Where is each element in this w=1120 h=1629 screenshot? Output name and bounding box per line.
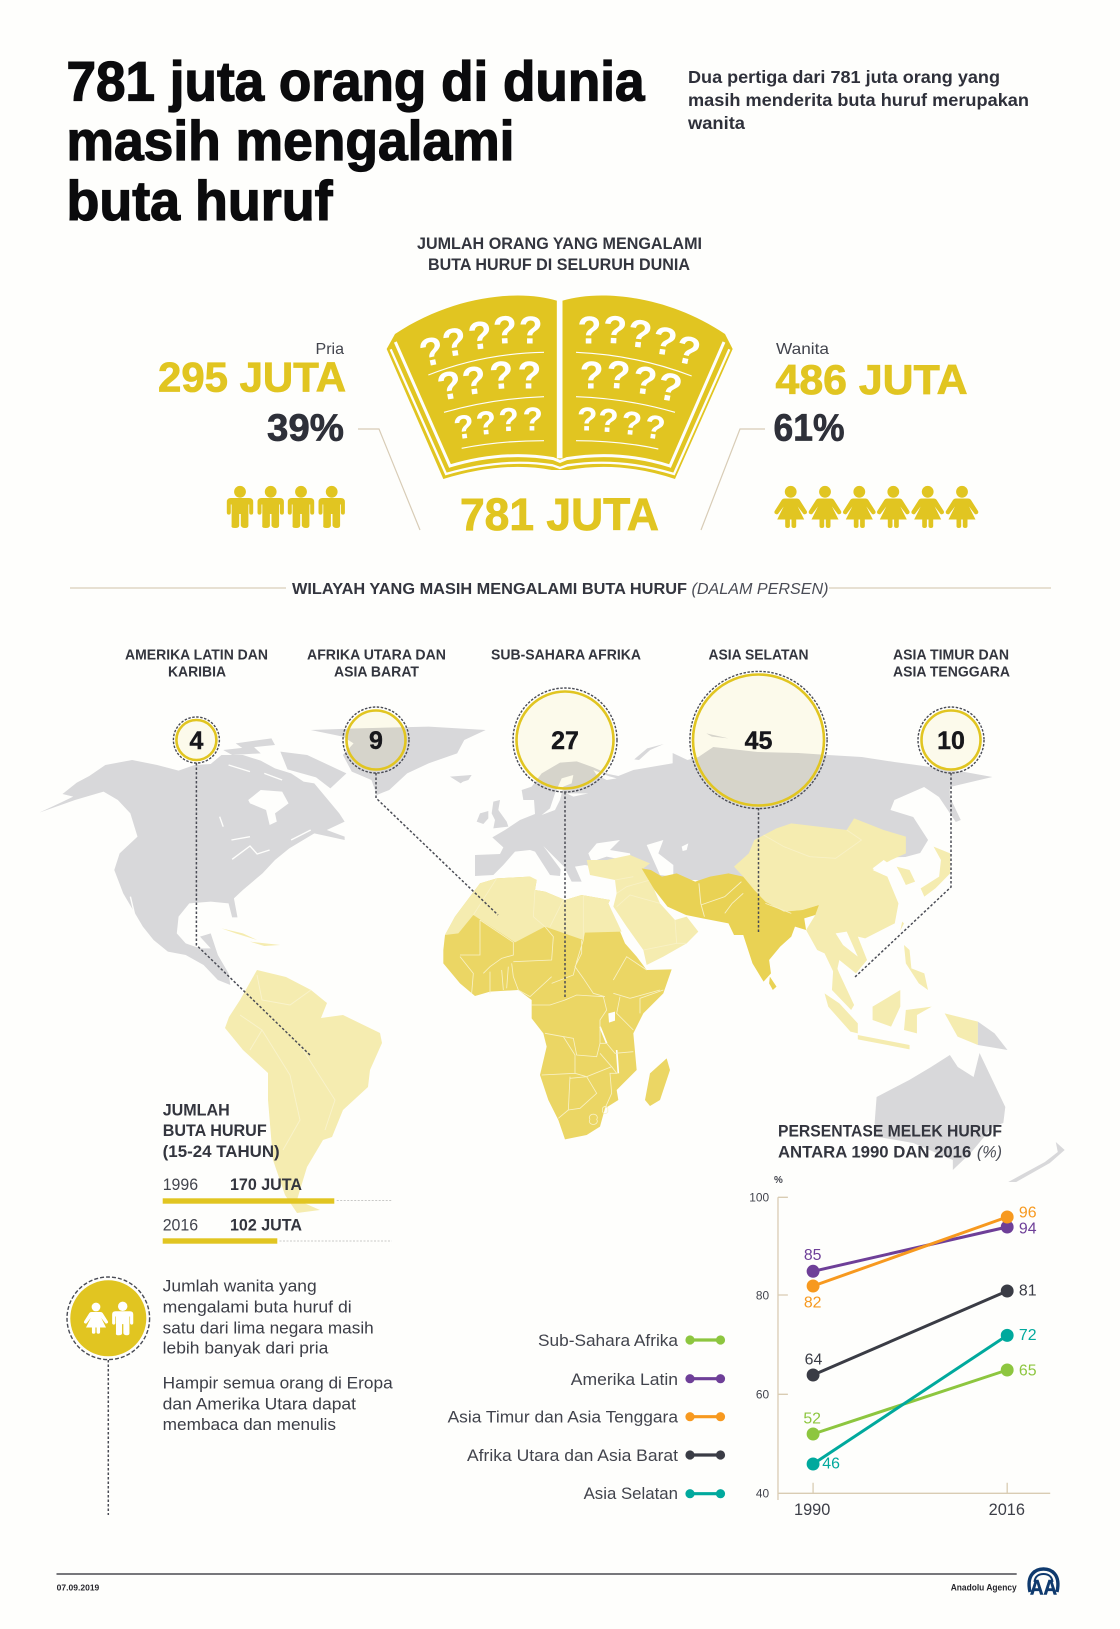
bar: 2016 <box>163 1216 392 1244</box>
icon: open book with question marks: ? <box>620 405 643 443</box>
bubble: 45 <box>690 671 827 809</box>
panel heading: (15-24 TAHUN) <box>163 1143 280 1161</box>
line chart <box>749 1175 1050 1519</box>
text block: notes: satu dari lima negara masih <box>163 1318 374 1337</box>
world map <box>21 727 1065 1213</box>
panel: men: 295 JUTA <box>158 354 346 401</box>
chart legend: Amerika Latin <box>571 1370 678 1389</box>
series: Sub-Sahara Afrika: 65 <box>1019 1362 1037 1379</box>
subtitle <box>687 67 1029 133</box>
panel: women: Wanita <box>776 341 829 358</box>
map: south america <box>225 970 382 1213</box>
icon: open book with question marks <box>387 295 733 479</box>
icon: open book with question marks: ? <box>466 313 494 359</box>
title: buta huruf <box>66 169 333 232</box>
icon: open book with question marks: ? <box>522 401 543 438</box>
series: Asia Selatan: 72 <box>1019 1327 1037 1344</box>
panel heading: JUMLAH <box>163 1102 230 1120</box>
icon: open book with question marks: ? <box>580 353 604 397</box>
leader lines <box>196 763 951 1056</box>
icon: Anadolu Agency logo: AA <box>1030 1576 1057 1600</box>
chart axes: 60 <box>756 1387 769 1402</box>
icon: open book with question marks: ? <box>597 402 619 441</box>
icon: open book with question marks: ? <box>577 308 601 352</box>
panel: women <box>774 341 978 528</box>
series: Asia Timur dan Asia Tenggara: 82 <box>804 1295 822 1312</box>
icon: open book with question marks: ? <box>415 328 448 376</box>
series: Afrika Utara dan Asia Barat <box>805 1283 1037 1382</box>
icon: couple badge <box>67 1277 150 1360</box>
icon: open book with question marks: ? <box>492 308 518 353</box>
icon: open book with question marks: ? <box>672 327 704 375</box>
icon: open book with question marks: ? <box>498 401 520 440</box>
region labels: ASIA TIMUR DAN <box>893 648 1009 664</box>
series: Afrika Utara dan Asia Barat: 64 <box>805 1351 822 1368</box>
icon: open book with question marks: ? <box>474 405 498 443</box>
title <box>66 50 645 232</box>
bar: 1996: 170 JUTA <box>230 1176 302 1194</box>
icon: open book with question marks: ? <box>626 311 654 357</box>
series: Asia Timur dan Asia Tenggara: 96 <box>1019 1204 1037 1221</box>
icon: open book with question marks: ? <box>460 358 489 404</box>
map: europe <box>460 761 720 883</box>
heading: global count <box>417 235 702 274</box>
map: australia and new zealand <box>875 1053 1065 1182</box>
series: Sub-Sahara Afrika <box>803 1362 1037 1440</box>
series: Amerika Latin: 85 <box>804 1247 822 1264</box>
chart legend: Asia Timur dan Asia Tenggara <box>448 1408 679 1427</box>
region labels <box>125 648 1011 681</box>
panel: men: Pria <box>316 341 344 358</box>
bubble: 9: 9 <box>369 727 383 755</box>
text block: notes: dan Amerika Utara dapat <box>163 1394 356 1413</box>
subtitle: wanita <box>687 113 745 133</box>
icon: open book with question marks: ? <box>577 401 598 438</box>
bubble: 4 <box>173 717 219 763</box>
bar: 2016: 2016 <box>163 1216 198 1235</box>
series: Asia Selatan: 46 <box>822 1455 840 1472</box>
total figure: 781 JUTA <box>460 489 659 540</box>
text block: notes: Jumlah wanita yang <box>163 1277 317 1296</box>
chart axes: 2016 <box>989 1501 1025 1519</box>
bar: 2016: 102 JUTA <box>230 1217 302 1235</box>
icon: open book with question marks: ? <box>650 318 680 365</box>
region labels: AMERIKA LATIN DAN <box>125 648 268 664</box>
chart heading: (%) <box>977 1143 1002 1161</box>
map: asia regions <box>634 733 1007 1050</box>
bubble: 27 <box>513 688 617 792</box>
icon: open book with question marks: ? <box>451 408 477 448</box>
text block: notes <box>163 1277 393 1434</box>
text block: notes: Hampir semua orang di Eropa <box>163 1373 393 1392</box>
heading: global count: JUMLAH ORANG YANG MENGALAMI <box>417 235 702 253</box>
region labels: SUB-SAHARA AFRIKA <box>491 648 642 664</box>
series: Amerika Latin: 94 <box>1019 1220 1037 1237</box>
panel heading <box>163 1102 280 1161</box>
icon: open book with question marks: ? <box>654 364 685 411</box>
chart legend: Sub-Sahara Afrika <box>538 1331 679 1350</box>
chart heading: PERSENTASE MELEK HURUF <box>778 1122 1002 1140</box>
region labels: ASIA TENGGARA <box>893 665 1011 681</box>
series: Asia Timur dan Asia Tenggara <box>804 1204 1037 1312</box>
series: Asia Selatan <box>807 1327 1037 1472</box>
panel: men: 39% <box>267 408 344 450</box>
icons: four men <box>227 486 345 528</box>
icon: open book with question marks: ? <box>434 362 465 410</box>
panel: youth illiteracy <box>163 1102 392 1244</box>
icon: Anadolu Agency logo <box>1029 1569 1058 1600</box>
bubble: 4: 4 <box>189 727 203 755</box>
heading: global count: BUTA HURUF DI SELURUH DUNIA <box>428 256 690 274</box>
bubble: 45: 45 <box>745 727 772 755</box>
icon: open book with question marks: ? <box>488 353 515 398</box>
icon: open book with question marks: ? <box>605 353 632 398</box>
chart legend: Afrika Utara dan Asia Barat <box>467 1446 678 1465</box>
icons: six women <box>774 486 978 528</box>
chart axes: 40 <box>756 1486 769 1501</box>
title: masih mengalami <box>66 109 514 172</box>
chart axes: 100 <box>749 1190 769 1205</box>
section heading: regions: WILAYAH YANG MASIH MENGALAMI BUTA HURUF <box>292 581 687 598</box>
text block: notes: lebih banyak dari pria <box>163 1338 329 1357</box>
panel: women: 486 JUTA <box>776 356 968 403</box>
region labels: KARIBIA <box>168 665 227 681</box>
section heading: regions: (DALAM PERSEN) <box>692 581 828 598</box>
chart heading: ANTARA 1990 DAN 2016 <box>778 1143 971 1161</box>
chart heading <box>778 1122 1002 1161</box>
bar: 1996 <box>163 1175 392 1204</box>
icon: open book with question marks: ? <box>519 308 543 352</box>
region labels: ASIA SELATAN <box>708 648 808 664</box>
bubble: 10: 10 <box>937 727 965 755</box>
bubble: 10 <box>918 707 984 773</box>
region labels: AFRIKA UTARA DAN <box>307 648 446 664</box>
chart legend <box>448 1331 725 1503</box>
icon: open book with question marks: ? <box>630 358 659 404</box>
footer credit: Anadolu Agency <box>951 1583 1017 1594</box>
bubble: 27: 27 <box>551 727 579 755</box>
icon: open book with question marks: ? <box>517 353 541 397</box>
map: africa <box>443 877 672 1139</box>
bubble: 9 <box>343 707 409 773</box>
map: british isles and iceland <box>460 775 508 828</box>
subtitle: masih menderita buta huruf merupakan <box>688 90 1029 110</box>
subtitle: Dua pertiga dari 781 juta orang yang <box>688 67 1000 87</box>
icon: open book with question marks: ? <box>642 408 667 448</box>
footer date: 07.09.2019 <box>57 1583 100 1593</box>
map: north america and greenland <box>21 727 486 985</box>
map: russia and north asia grey <box>659 747 992 880</box>
icon: open book with question marks: ? <box>602 308 628 353</box>
title: 781 juta orang di dunia <box>66 50 645 113</box>
panel heading: BUTA HURUF <box>163 1122 267 1140</box>
panel: women: 61% <box>774 408 844 450</box>
text block: notes: membaca dan menulis <box>163 1415 336 1434</box>
chart axes: 80 <box>756 1288 769 1303</box>
icon: open book with question marks: ? <box>439 319 470 366</box>
chart axes: % <box>774 1175 783 1186</box>
chart legend: Asia Selatan <box>584 1484 678 1503</box>
map: inland seas <box>529 840 688 877</box>
series: Amerika Latin <box>804 1220 1037 1278</box>
bar: 1996: 1996 <box>163 1175 198 1194</box>
map: middle east <box>587 855 698 965</box>
connector lines from book <box>358 429 765 530</box>
series: Afrika Utara dan Asia Barat: 81 <box>1019 1283 1037 1300</box>
chart axes <box>749 1175 1050 1519</box>
region labels: ASIA BARAT <box>334 665 419 681</box>
text block: notes: mengalami buta huruf di <box>163 1297 352 1316</box>
chart axes: 1990 <box>794 1501 830 1519</box>
panel: men <box>158 341 346 528</box>
series: Sub-Sahara Afrika: 52 <box>803 1410 821 1427</box>
